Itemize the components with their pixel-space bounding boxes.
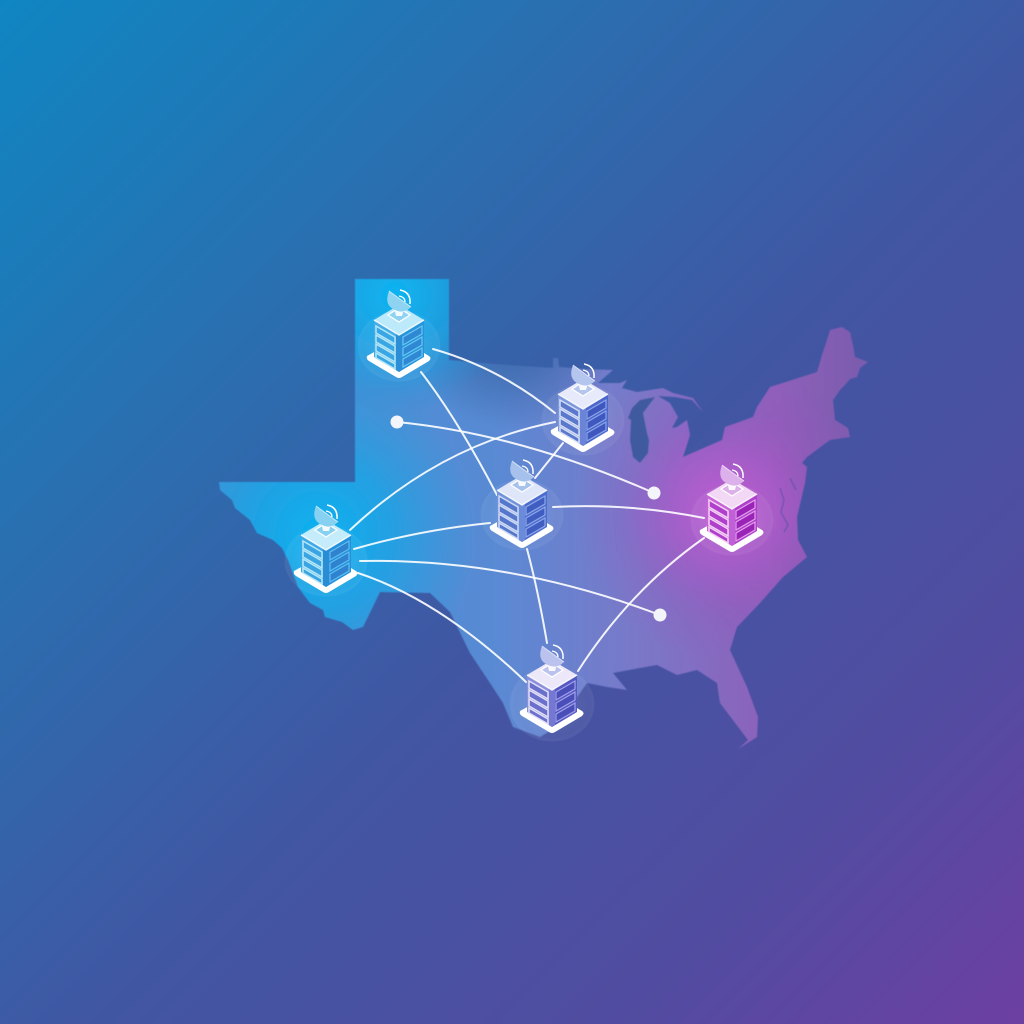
server: gulf coast [520, 645, 584, 733]
lake michigan [628, 397, 655, 463]
server: east coast highlighted [700, 464, 764, 552]
chesapeake and delaware bays [780, 448, 826, 532]
server: panhandle [367, 290, 430, 378]
server: west texas [294, 505, 358, 593]
map: Texas-focused United States silhouette [218, 278, 868, 748]
network links [350, 349, 704, 682]
server: midwest [551, 364, 614, 452]
node dots [390, 416, 666, 622]
server halos [284, 310, 774, 742]
server: central [490, 460, 554, 548]
